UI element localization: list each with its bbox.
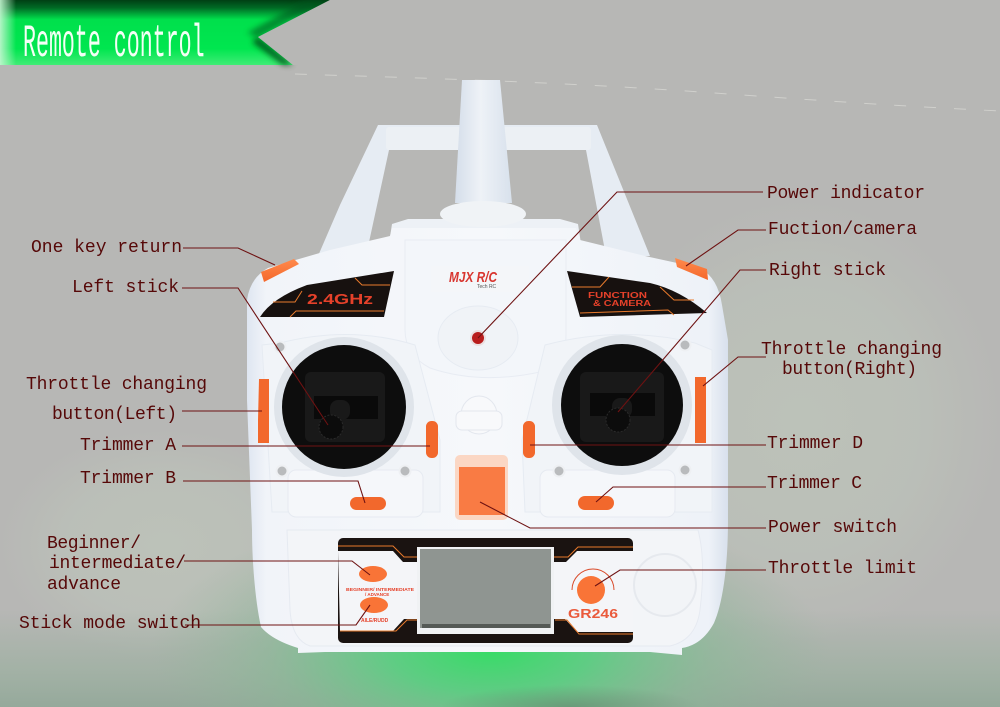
round dial: [634, 554, 696, 616]
LCD panel: / ADVANCE: [365, 592, 389, 597]
left throttle changing button: [258, 379, 269, 443]
throttle limit knob: GR246: [568, 606, 618, 621]
label: function camera: Fuction/camera: [768, 220, 917, 240]
label: beginner intermediate advance: advance: [47, 575, 121, 595]
LCD panel: AILE/RUDD: [361, 618, 389, 624]
label: beginner intermediate advance: [47, 534, 186, 595]
label: throttle changing button right: Throttle changing: [761, 340, 942, 360]
label: left stick: Left stick: [72, 278, 179, 298]
label: throttle changing button left: button(Left): [52, 405, 177, 425]
label: power switch: Power switch: [768, 518, 897, 538]
remote control transmitter: [247, 80, 728, 655]
title: Remote control: [23, 18, 205, 70]
power indicator LED: [438, 306, 518, 370]
controller body: [247, 228, 728, 655]
trimmer D: [523, 421, 535, 458]
right throttle changing button: [695, 377, 706, 443]
trimmer C: [578, 496, 614, 510]
label: throttle changing button left: Throttle changing: [26, 375, 207, 395]
decal: function and camera: [567, 271, 707, 317]
logo: MJX R/C: [431, 266, 529, 292]
antenna and handle: [318, 80, 650, 256]
label: beginner intermediate advance: Beginner/: [47, 534, 141, 554]
screws: [274, 340, 690, 476]
LCD panel: [338, 538, 696, 643]
function camera button: [675, 258, 708, 280]
labels: left side: [19, 238, 207, 634]
decal: function and camera: & CAMERA: [593, 299, 651, 308]
trimmer B: [350, 497, 386, 510]
label: stick mode switch: Stick mode switch: [19, 614, 201, 634]
logo: MJX R/C: MJX R/C: [449, 269, 498, 286]
label: trimmer D: Trimmer D: [767, 434, 863, 454]
LCD screen: [420, 549, 551, 628]
label: trimmer C: Trimmer C: [767, 474, 862, 494]
decal: 2.4GHz: 2.4GHz: [307, 292, 373, 308]
stick mode button: [360, 597, 388, 613]
label: beginner intermediate advance: intermediate/: [49, 554, 186, 574]
left stick: [274, 337, 414, 477]
power switch: [455, 455, 508, 520]
trimmer A: [426, 421, 438, 458]
label: throttle limit: Throttle limit: [768, 559, 917, 579]
orange controls: [258, 258, 708, 520]
one key return button: [261, 259, 299, 282]
mode button: [359, 566, 387, 582]
right stick: [552, 335, 692, 475]
label: throttle changing button left: [26, 375, 207, 425]
decal: 2.4GHz: [260, 271, 394, 317]
LCD panel: BEGINNER/ INTERMEDIATE: [346, 587, 414, 592]
decal: function and camera: FUNCTION: [588, 291, 647, 300]
labels: right side: [761, 184, 942, 579]
label: trimmer B: Trimmer B: [80, 469, 176, 489]
label: throttle changing button right: button(Right): [782, 360, 917, 380]
label: trimmer A: Trimmer A: [80, 436, 176, 456]
leader lines: [182, 192, 766, 625]
title banner: [0, 0, 345, 70]
logo: MJX R/C: Tech RC: [477, 284, 497, 290]
label: power indicator: Power indicator: [767, 184, 925, 204]
center key: [456, 396, 502, 434]
label: throttle changing button right: [761, 340, 942, 380]
label: one key return: One key return: [31, 238, 182, 258]
label: right stick: Right stick: [769, 261, 886, 281]
throttle limit knob: [568, 569, 618, 621]
